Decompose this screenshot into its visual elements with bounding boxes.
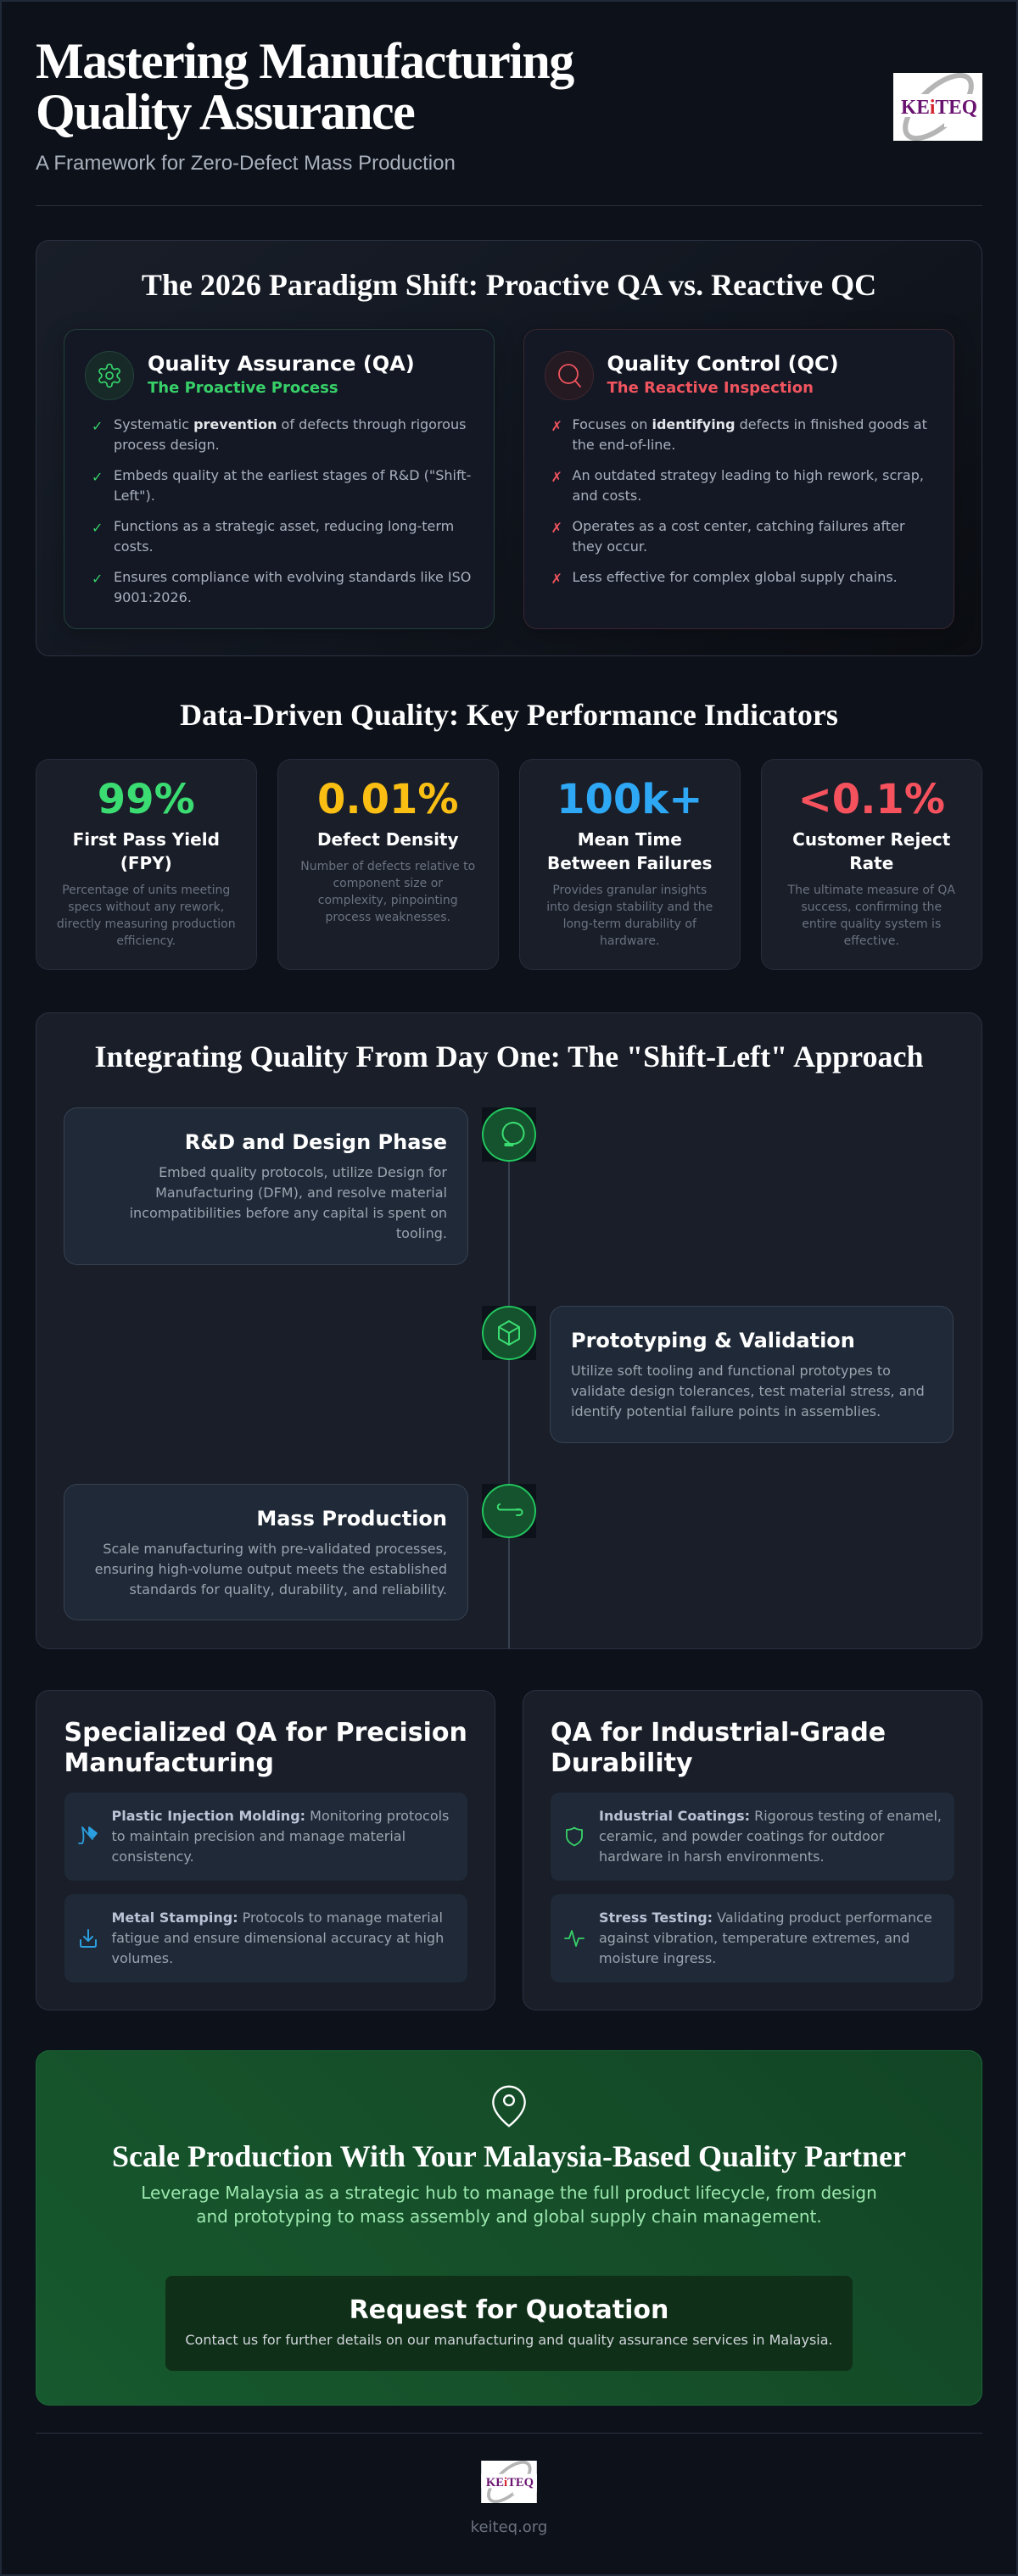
heading: durability — [551, 1718, 886, 1778]
KPI card: defect density: Defect Density — [317, 829, 459, 850]
text: CTA description — [141, 2183, 877, 2227]
KPI card: MTBF: hardware. — [600, 934, 659, 948]
node icon: cube — [482, 1306, 536, 1360]
box: request for quotation: Request for Quotation — [350, 2294, 668, 2325]
icon: pulse — [564, 1930, 585, 1947]
title — [36, 33, 574, 140]
panel: paradigm shift — [36, 240, 982, 656]
list: QA points: 9001:2026. — [114, 589, 192, 605]
KPI card: FPY: efficiency. — [116, 934, 176, 948]
heading: QC: Quality Control (QC) — [607, 352, 839, 376]
KPI card: reject rate: Rate — [849, 853, 893, 873]
step card: mass production: ensuring high-volume output meets the established — [95, 1560, 447, 1577]
KPI card: defect density: 0.01% — [317, 776, 459, 823]
heading: durability: QA for Industrial-Grade — [551, 1718, 886, 1748]
heading: paradigm shift: The 2026 Paradigm Shift: Proactive QA vs. Reactive QC — [142, 268, 876, 302]
step card: R&D: tooling. — [396, 1224, 447, 1241]
list: QA points: Ensures compliance with evolving standards like ISO — [114, 569, 471, 585]
footer — [36, 2433, 982, 2543]
panel: KPIs — [36, 698, 982, 970]
KPI card: MTBF: Between Failures — [547, 853, 712, 873]
list: QA points: ✓ — [92, 520, 103, 536]
KPI card: FPY: directly measuring production — [57, 917, 236, 931]
step card: mass production: Scale manufacturing with pre-validated processes, — [103, 1540, 447, 1557]
KPI card: defect density: process weaknesses. — [326, 911, 450, 924]
step card: R&D: incompatibilities before any capital is spent on — [130, 1204, 447, 1221]
item: stress testing: against vibration, temperature extremes, and — [599, 1930, 909, 1945]
text: CTA description: and prototyping to mass assembly and global supply chain management. — [196, 2206, 822, 2227]
list: QC points: An outdated strategy leading to high rework, scrap, — [572, 467, 924, 483]
KPI card: reject rate — [761, 759, 982, 970]
subheading: QC: The Reactive Inspection — [607, 379, 814, 397]
subtitle: A Framework for Zero-Defect Mass Production — [36, 152, 456, 175]
KPI card: MTBF — [519, 759, 740, 970]
item: stress testing: Stress Testing: Validating product performance — [599, 1910, 932, 1925]
footer logo: KEiTEQ — [481, 2461, 537, 2503]
KPI card: MTBF: Mean Time — [578, 829, 682, 850]
list: QC points — [551, 416, 927, 587]
icon: shield — [566, 1826, 583, 1847]
item: plastic injection molding — [64, 1793, 467, 1881]
panel: precision manufacturing — [36, 1690, 495, 2010]
item: plastic injection molding: consistency. — [112, 1848, 194, 1864]
list: QC points: Operates as a cost center, catching failures after — [572, 518, 905, 534]
item: metal stamping — [64, 1894, 467, 1982]
box: request for quotation: Contact us for further details on our manufacturing and quality assurance services in Malaysia. — [185, 2332, 833, 2347]
item: industrial coatings: hardware in harsh environments. — [599, 1848, 825, 1864]
header — [36, 33, 982, 206]
step card: R&D: Manufacturing (DFM), and resolve material — [155, 1184, 447, 1201]
list: QA points: ✓ — [92, 469, 103, 485]
panel: call to action — [36, 2050, 982, 2406]
list: QC points: ✗ — [551, 520, 562, 536]
list: QA points: Embeds quality at the earliest stages of R&D ("Shift- — [114, 467, 471, 483]
item: industrial coatings: ceramic, and powder coatings for outdoor — [599, 1828, 884, 1843]
title: Quality Assurance — [36, 84, 414, 140]
step card: R&D: R&D and Design Phase — [185, 1130, 447, 1154]
logo: KEiTEQ — [893, 73, 982, 141]
step card: prototyping: Prototyping & Validation — [571, 1329, 855, 1352]
KPI card: defect density — [277, 759, 499, 970]
footer link text: keiteq.org — [471, 2518, 547, 2536]
list: QC points: the end-of-line. — [572, 437, 675, 453]
icon: map pin — [492, 2086, 526, 2127]
heading: KPIs: Data-Driven Quality: Key Performance Indicators — [180, 698, 838, 732]
KPI card: MTBF: Provides granular insights — [552, 884, 707, 897]
icon: molding — [78, 1826, 98, 1844]
list: QC points: Focuses on identifying defects in finished goods at — [572, 416, 927, 432]
step card: prototyping — [550, 1306, 954, 1443]
step card: R&D: Embed quality protocols, utilize Design for — [159, 1163, 447, 1180]
list: QA points: process design. — [114, 437, 220, 453]
text: CTA description: Leverage Malaysia as a strategic hub to manage the full product lifecycle, from design — [141, 2183, 877, 2203]
list: QA points — [92, 416, 471, 605]
KPI card: defect density: complexity, pinpointing — [318, 894, 458, 907]
item: stress testing — [551, 1894, 954, 1982]
panel: industrial durability — [523, 1690, 982, 2010]
list: QC points: ✗ — [551, 418, 562, 434]
item: plastic injection molding: Plastic Injection Molding: Monitoring protocols — [112, 1808, 449, 1823]
list: QA points: costs. — [114, 538, 154, 555]
KPI card: MTBF: 100k+ — [557, 776, 702, 823]
step card: R&D — [64, 1107, 468, 1265]
KPI card: reject rate: entire quality system is — [802, 917, 941, 931]
list: QA points: Left"). — [114, 488, 155, 504]
item: plastic injection molding: to maintain precision and manage material — [112, 1828, 406, 1843]
heading: QA: Quality Assurance (QA) — [148, 352, 415, 376]
step card: mass production — [64, 1484, 468, 1620]
icon: gear — [85, 351, 134, 400]
KPI card: FPY: First Pass Yield — [73, 829, 220, 850]
panel: shift-left timeline — [36, 1012, 982, 1649]
node icon: conveyor — [482, 1484, 536, 1538]
KPI card: reject rate: The ultimate measure of QA — [788, 884, 955, 897]
KPI card: reject rate: <0.1% — [798, 776, 945, 823]
list: QA points: ✓ — [92, 418, 103, 434]
KPI card: MTBF: into design stability and the — [546, 900, 713, 914]
step card: prototyping: Utilize soft tooling and functional prototypes to — [571, 1362, 891, 1379]
list: QC points: ✗ — [551, 571, 562, 587]
KPI card: FPY: Percentage of units meeting — [62, 884, 230, 897]
title: Mastering Manufacturing — [36, 33, 573, 89]
box: request for quotation — [165, 2276, 853, 2371]
item: stress testing: moisture ingress. — [599, 1950, 716, 1965]
step card: prototyping: validate design tolerances, test material stress, and — [571, 1382, 925, 1399]
item: industrial coatings: Industrial Coatings: Rigorous testing of enamel, — [599, 1808, 942, 1823]
KPI card: defect density: component size or — [333, 877, 443, 890]
footer logo: KEiTEQ: KEiTEQ — [486, 2476, 534, 2490]
list: QA points: Systematic prevention of defects through rigorous — [114, 416, 466, 432]
step card: prototyping: identify potential failure points in assemblies. — [571, 1402, 881, 1419]
list: QA points: Functions as a strategic asset, reducing long-term — [114, 518, 454, 534]
node icon: idea — [482, 1107, 536, 1162]
KPI card: reject rate: Customer Reject — [792, 829, 950, 850]
list: QC points: and costs. — [572, 488, 641, 504]
KPI card: reject rate: effective. — [844, 934, 899, 948]
KPI card: FPY — [36, 759, 256, 970]
heading: shift-left: Integrating Quality From Day One: The "Shift-Left" Approach — [95, 1040, 923, 1073]
heading: precision — [64, 1718, 467, 1778]
KPI card: FPY: (FPY) — [120, 853, 172, 873]
icon: magnifier — [545, 351, 594, 400]
logo: KEiTEQ: KEiTEQ — [901, 97, 977, 119]
list: QC points: they occur. — [572, 538, 647, 555]
KPI card: MTBF: long-term durability of — [563, 917, 696, 931]
list: QC points: ✗ — [551, 469, 562, 485]
list: QC points: Less effective for complex global supply chains. — [572, 569, 898, 585]
heading: durability: Durability — [551, 1748, 693, 1778]
icon: stamping — [80, 1929, 97, 1948]
KPI card: reject rate: success, confirming the — [801, 900, 942, 914]
item: metal stamping: fatigue and ensure dimensional accuracy at high — [112, 1930, 444, 1945]
KPI card: FPY: specs without any rework, — [68, 900, 224, 914]
item: industrial coatings — [551, 1793, 954, 1881]
KPI card: FPY: 99% — [98, 776, 195, 823]
heading: precision: Manufacturing — [64, 1748, 274, 1778]
item: metal stamping: volumes. — [112, 1950, 173, 1965]
step card: mass production: Mass Production — [256, 1507, 447, 1531]
KPI card: defect density: Number of defects relative to — [300, 860, 475, 873]
card: quality control — [523, 329, 954, 629]
step card: mass production: standards for quality, durability, and reliability. — [130, 1581, 447, 1597]
heading: CTA: Scale Production With Your Malaysia-Based Quality Partner — [112, 2139, 906, 2173]
heading: precision: Specialized QA for Precision — [64, 1718, 467, 1748]
list: QA points: ✓ — [92, 571, 103, 587]
subheading: QA: The Proactive Process — [148, 379, 338, 397]
card: quality assurance — [64, 329, 495, 629]
item: metal stamping: Metal Stamping: Protocols to manage material — [112, 1910, 443, 1925]
